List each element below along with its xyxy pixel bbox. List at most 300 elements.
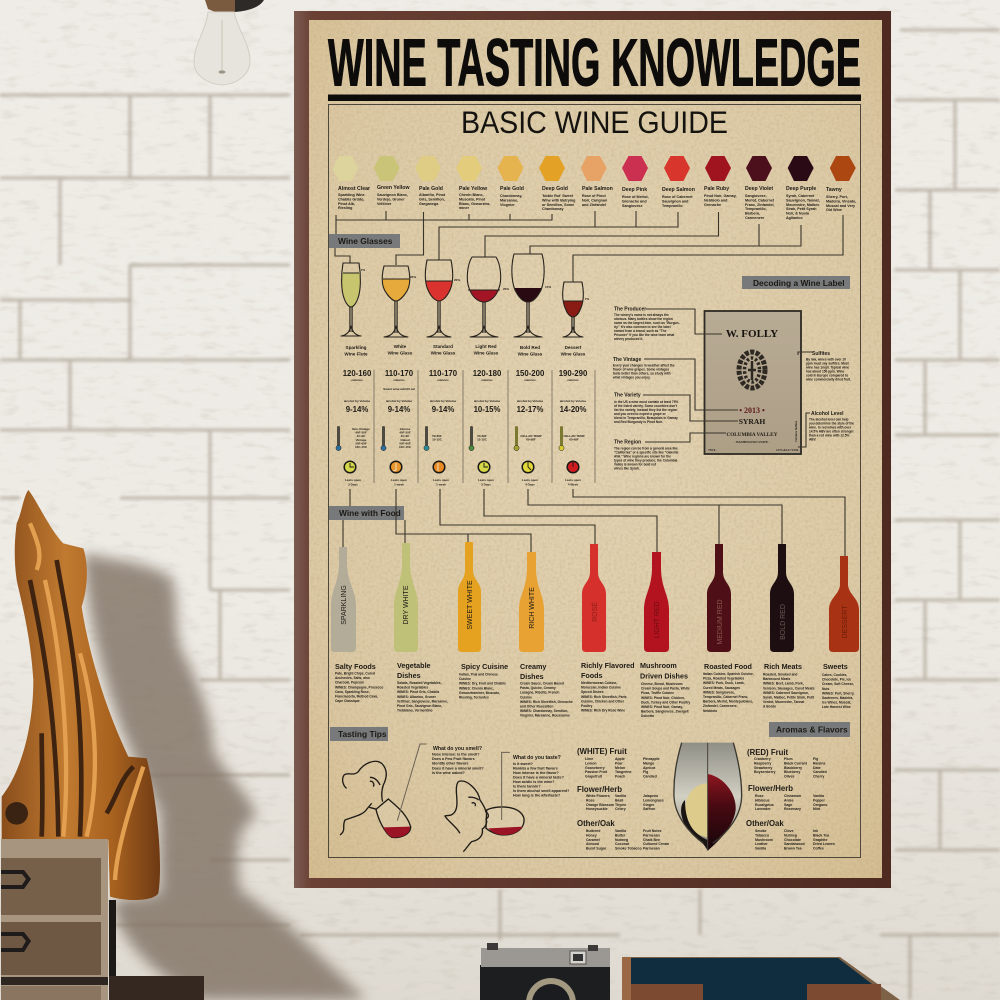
thermometers: [336, 426, 585, 451]
aromas: red wine list: Rose: [755, 794, 764, 798]
aromas: red wine list: Nutmeg: [784, 833, 797, 837]
hex pale gold: [415, 156, 441, 181]
thermometers: 60-68F: [526, 437, 536, 441]
glass names: [344, 344, 586, 357]
aromas: red wine list: Chocolate: [784, 838, 801, 842]
what do you smell: Does a Few Fruit flavors: [432, 757, 475, 761]
aromas: red wine list: Flower/Herb: [748, 784, 793, 793]
thermometers: Intense: [400, 427, 411, 431]
nutrition columns: calories and alcohol: 110-170: [429, 369, 458, 378]
food pairing: roasted food: WINES: Pork, Duck, Lamb,: [703, 681, 745, 685]
thermometers: 12-15C: [477, 437, 488, 441]
bottle: bold red: [770, 544, 794, 652]
aromas: red wine list: Sage: [784, 803, 792, 807]
food pairing: sweets: Ice Wines, Muscat,: [822, 701, 851, 705]
label note: alcohol level: ABV.: [809, 438, 817, 442]
aromas: red wine list: Olives: [784, 775, 795, 779]
clocks: lasts open: 4 Week: [568, 483, 578, 487]
hex deep purple: [788, 156, 814, 181]
aromas: red wine list: Candied: [813, 770, 827, 774]
aromas: white wine list: Caramel: [586, 838, 600, 842]
wine label diagram: SYRAH: [739, 417, 765, 426]
label note: sulfites: By law, wines with over 10: [806, 358, 846, 362]
nutrition columns: calories and alcohol: 150-200: [516, 369, 545, 378]
tawny text: Old Wine: [826, 208, 842, 212]
food pairing: vegetable dishes: Salads, Roasted Vegetables,: [397, 681, 442, 685]
pale salmon text: Noir, Carignan: [582, 198, 608, 202]
deep gold text: Chardonnay: [542, 207, 564, 211]
deep purple text: Aglianico: [786, 216, 803, 220]
clocks: lasts open: Lasts open: [478, 478, 494, 482]
deep gold text: Wine with Botrying: [542, 198, 575, 202]
food pairing: richly flavored foods: Moroccan, Indian Cuisine: [581, 686, 621, 690]
aromas: red wine list: Vanilla: [755, 847, 766, 851]
pale yellow text: Chenin Blanc,: [459, 193, 484, 197]
thermometers: 50F-60F: [399, 442, 411, 446]
aromas: white wine list: [577, 747, 669, 851]
label note: the region: wines like Syrah.: [613, 466, 640, 470]
aromas: white wine list: Lemongrass: [643, 798, 664, 802]
food pairing: sweets: Cream, Soft Cheese,: [822, 682, 854, 686]
food pairing: mushroom driven dishes: Duck, Turkey and Other Poultry: [641, 700, 690, 704]
clocks: lasts open: Lasts open: [565, 478, 581, 482]
food pairing: richly flavored foods: Mediterranean Cuisine,: [581, 681, 617, 685]
food pairing: creamy dishes: Cream Sauce, Cream Based: [520, 682, 564, 686]
deep violet text: Barbera,: [745, 212, 760, 216]
label note: the variety: In the US a wine must contain at least 75%: [614, 400, 678, 404]
aromas: white wine list: Cultured Cream: [643, 842, 669, 846]
inner border: [328, 104, 860, 858]
aromas: white wine list: Vanilla: [615, 794, 626, 798]
heading: tasting tips: [330, 727, 388, 741]
food pairing: vegetable dishes: WINES: Pinot Gris, Chablis: [397, 690, 439, 694]
food pairing: richly flavored foods: Poultry: [581, 704, 593, 708]
label note: alcohol level: wine. In red wines with over: [808, 426, 852, 430]
aromas: white wine list: Vanilla: [615, 829, 626, 833]
deep purple text: Deep Purple: [786, 186, 816, 192]
food pairing: spicy cuisine: Gewurztraminer, Muscato,: [459, 691, 500, 695]
aromas: red wine list: Lavender: [755, 807, 771, 811]
food pairing: mushroom driven dishes: Mushroom: [640, 661, 677, 670]
pale gold 2 text: Pale Gold: [500, 186, 524, 192]
aromas: white wine list: Butter: [615, 833, 626, 837]
clocks: lasts open: 3 Days: [348, 483, 358, 487]
label note: the region: "California" or a specific site like "Oakville: [614, 450, 679, 454]
heading: wine with food: [329, 506, 404, 520]
glass: light red wine: 20%: [503, 287, 509, 291]
label note: the producer: dy." It's also common to see the label: [614, 325, 671, 329]
nutrition columns: calories and alcohol: calories: [567, 378, 579, 382]
aromas: red wine list: Smoke: [755, 829, 767, 833]
wine label diagram: - WASHINGTON STATE -: [734, 440, 770, 444]
aromas: red wine list: Raspberry: [754, 761, 771, 765]
deep purple text: Syrah, Cabernet: [786, 194, 815, 198]
label note: sulfites: wine commercially dried fruit.: [805, 378, 851, 382]
deep gold text: or Semillon, Some: [542, 203, 574, 207]
clocks: lasts open: Lasts open: [391, 478, 407, 482]
aromas: red wine list: Black Tea: [813, 833, 829, 837]
connector lines glasses to bottles: [343, 489, 845, 556]
aromas: white wine list: Celery: [615, 807, 626, 811]
label note: sulfites: ppm must say sulfites. Most: [806, 362, 850, 366]
nutrition columns: calories and alcohol: calories: [351, 378, 363, 382]
thermometers: CELLAR TEMP: [520, 434, 542, 438]
food pairing: vegetable dishes: Roasted Vegetables: [397, 686, 428, 690]
wine label diagram: Contains Sulfites: [794, 420, 798, 442]
nutrition columns: calories and alcohol: calories: [481, 378, 493, 382]
label note: alcohol level: you determine the style of the: [809, 422, 854, 426]
deep salmon text: Tempranillo: [662, 204, 683, 208]
aromas: white wine list: Other/Oak: [577, 819, 615, 828]
nutrition columns: calories and alcohol: 9-14%: [432, 405, 454, 414]
food pairing: spicy cuisine: Cuisine: [459, 677, 471, 681]
aromas: white wine list: Honey: [586, 833, 597, 837]
green yellow text: Verdejo, Gruner: [377, 197, 405, 201]
aromas: red wine list: Eucalyptus: [755, 803, 774, 807]
aromas: white wine list: Fig: [643, 770, 648, 774]
vintage camera: [480, 943, 610, 1000]
thermometers: 4C-9C: [357, 434, 366, 438]
wine colour hexagons: [333, 156, 856, 181]
food pairing: richly flavored foods: WINES: Rich Dry Rose Wine: [581, 709, 625, 713]
label note: sulfites: has about 150 ppm. Wine: [806, 370, 844, 374]
wine label diagram: [704, 311, 801, 454]
deep salmon text: Rose of Cabernet: [662, 195, 693, 199]
aromas: red wine list: Leather: [755, 842, 768, 846]
food pairing: vegetable dishes: Pinot Gris, Sauvignon Blanc,: [397, 704, 442, 708]
food pairing: mushroom driven dishes: Cream Soups and Pasta, White: [641, 687, 690, 691]
pale yellow text: Muscato, Pinot: [459, 197, 486, 201]
hex deep salmon: [664, 156, 690, 181]
what do you smell: Does it have a mineral smell?: [432, 766, 484, 770]
aromas: red wine list: Mint: [813, 807, 821, 811]
thermometers: CELLAR TEMP: [563, 434, 585, 438]
food pairing: sweets: Sauternes, Madeira,: [822, 696, 853, 700]
glass names: Dessert: [565, 345, 582, 350]
bottle: medium red: MEDIUM RED: [717, 599, 724, 645]
hex pale gold 2: [498, 156, 524, 181]
pale salmon text: Rose of Pinot: [582, 194, 607, 198]
food pairing: vegetable dishes: Trebbiano, Vermentino: [397, 709, 433, 713]
clocks: lasts open: Lasts open: [345, 478, 361, 482]
glass names: Light Red: [475, 344, 497, 349]
food pairing: creamy dishes: and Other Roussillon: [520, 704, 553, 708]
aromas: red wine list: Pepper: [813, 798, 826, 802]
hex deep violet: [746, 156, 772, 181]
aromas: white wine list: Gooseberry: [585, 766, 605, 770]
aromas: red wine list: Plum: [784, 757, 793, 761]
food pairing: salty foods: Charcoal, Popcorn: [335, 681, 364, 685]
deep purple text: Noir, & Nuvia: [786, 212, 810, 216]
label note: the variety: The Variety: [614, 392, 641, 398]
nutrition columns: calories and alcohol: alcohol by Volume: [474, 399, 500, 403]
food pairing: salty foods: Salty Foods: [335, 662, 376, 671]
what do you taste: Is there tannin?: [513, 784, 541, 788]
heading: decoding a wine label: [742, 276, 850, 289]
deep violet text: Tempranillo,: [745, 207, 767, 211]
wooden drawers: [1, 839, 204, 1000]
food pairing: spicy cuisine: WINES: Chenin Blanc,: [459, 686, 494, 690]
nutrition columns: calories and alcohol: calories: [437, 378, 449, 382]
food pairing: rich meats: Roasted, Smoked and: [763, 672, 797, 676]
nutrition columns: calories and alcohol: alcohol by Volume: [560, 399, 586, 403]
food pairing: rich meats: Barbecued Meats: [763, 677, 790, 681]
food pairing: creamy dishes: WINES: Chardonnay, Semillon,: [520, 709, 568, 713]
pale gold 2 text: Chardonnay,: [500, 194, 522, 198]
label note: the region: AVA." Wine regions are known for the: [614, 454, 671, 458]
what do you taste: Is it sweet?: [513, 762, 534, 766]
label note: the region: The Region: [614, 440, 641, 446]
glass: bold red wine: [508, 254, 551, 337]
nutrition columns: calories and alcohol: 110-170: [385, 369, 414, 378]
glass names: Standard: [433, 344, 453, 349]
green yellow text: Green Yellow: [377, 185, 410, 191]
food pairing: creamy dishes: WINES: Rich Sheetfish, Grenache: [520, 700, 573, 704]
pale gold text: Gris, Semillon,: [419, 197, 445, 201]
label note: alcohol level: 14.5% ABV are often stronger: [809, 430, 854, 434]
food pairing: roasted food: Italian Cuisine, Spanish Cuisine,: [703, 672, 754, 676]
hex pale salmon: [581, 156, 607, 181]
deep pink text: Deep Pink: [622, 187, 647, 193]
aromas: white wine list: Melon: [615, 766, 625, 770]
nutrition columns: calories and alcohol: alcohol by Volume: [386, 399, 412, 403]
nutrition columns: calories and alcohol: 10-15%: [474, 405, 501, 414]
label note: the producer: The winery's name is not always the: [614, 313, 669, 317]
heading: decoding a wine label: Decoding a Wine Label: [753, 278, 845, 288]
aromas: red wine list: Cherry: [813, 775, 824, 779]
pale yellow text: Pale Yellow: [459, 186, 488, 192]
aromas: red wine list: Raisins: [813, 761, 826, 765]
food pairing: richly flavored foods: Richly Flavored: [581, 661, 635, 670]
aromas: white wine list: Lemon: [585, 761, 596, 765]
what do you smell: Is the wine oaked?: [432, 771, 466, 775]
label note: alcohol level: Alcohol Level: [811, 411, 844, 417]
thermometers: 10-15C: [432, 437, 443, 441]
thermometers: 10C-15C: [355, 445, 368, 449]
deep pink text: Sangiovese: [622, 204, 642, 208]
aromas: red wine list: Brown Tea: [784, 847, 802, 851]
wine label diagram: 14%ALC/VOL: [776, 448, 800, 452]
nutrition columns: calories and alcohol: 9-14%: [346, 405, 368, 414]
what do you taste: How intense is the flavor?: [513, 771, 559, 775]
aromas: red wine list: Oregano: [813, 803, 827, 807]
food pairing: rich meats: & Bordo: [763, 705, 776, 709]
label note: alcohol level: The alcohol level can help: [809, 418, 849, 422]
nutrition columns: calories and alcohol: calories: [393, 378, 405, 382]
aromas: white wine list: Fruit Notes: [643, 829, 662, 833]
glass: bold red wine: 15%: [545, 285, 551, 289]
food pairing: rich meats: WINES: Beef, Lamb, Pork,: [763, 682, 804, 686]
aromas: white wine list: (WHITE) Fruit: [577, 747, 627, 756]
aromas: white wine list: Tangerine: [615, 770, 632, 774]
wall shadow of wood sculpture: [83, 553, 367, 1000]
aromas: white wine list: Basil: [615, 798, 623, 802]
deep salmon text: Deep Salmon: [662, 187, 695, 193]
glass names: Wine Glass: [474, 351, 499, 356]
what do you taste: Does it have a mineral taste?: [513, 776, 565, 780]
glass: standard wine: [424, 260, 460, 338]
thermometers: Oaked: [400, 438, 410, 442]
pale gold 2 text: Viognier: [500, 203, 515, 207]
glass names: Wine Flute: [344, 352, 368, 357]
hanging light bulb: [194, 0, 264, 85]
wine colour descriptions: [338, 185, 856, 220]
aromas: white wine list: Lime: [585, 757, 593, 761]
aromas: white wine list: Flower/Herb: [577, 785, 622, 794]
food pairing: vegetable dishes: Vegetable: [397, 661, 431, 670]
food pairing: creamy dishes: Creamy: [520, 662, 546, 671]
clocks: lasts open: 4 Days: [525, 483, 535, 487]
thermometers: 53-60F: [477, 434, 487, 438]
thermometers: Vintage: [356, 438, 367, 442]
aromas: white wine list: Jalapeno: [643, 794, 658, 798]
deep violet text: Carmenere: [745, 216, 764, 220]
connector lines colours to glasses: [335, 211, 843, 282]
label note: the producer: name as the largest item, such as "Burgun-: [614, 321, 680, 325]
aromas: red wine list: Other/Oak: [746, 819, 784, 828]
wine label diagram: • 2013 •: [739, 406, 765, 415]
aromas: red wine list: Tobacco: [755, 833, 769, 837]
food pairing: roasted food: Tempranillo, Cabernet Franc,: [703, 695, 748, 699]
glass names: Wine Glass: [518, 352, 543, 357]
bottle: rose: ROSÉ: [590, 602, 599, 622]
framed poster: [294, 11, 891, 888]
aromas: red wine list: Blackberry: [784, 766, 802, 770]
deep gold text: 'Noble Rot' Sweet: [542, 194, 574, 198]
green yellow text: Veltliner: [377, 202, 392, 206]
what do you taste: How long is the aftertaste?: [513, 794, 561, 798]
nutrition columns: calories and alcohol: 120-180: [473, 369, 502, 378]
label leader lines: [643, 309, 813, 447]
deep violet text: Deep Violet: [745, 186, 773, 192]
aromas: white wine list: Rose: [586, 798, 595, 802]
subtitle: BASIC WINE GUIDE: [461, 104, 728, 140]
aromas: red wine list: Vanilla: [813, 794, 824, 798]
aromas: white wine list: Peach: [615, 775, 625, 779]
wine label diagram: 75CL: [708, 448, 717, 452]
label note: the producer: obvious. Many bottles show the region: [614, 317, 673, 321]
food pairing: sweets: Sweets: [823, 662, 848, 671]
food pairing: mushroom driven dishes: Pizza, Truffle Cuisine: [641, 691, 674, 695]
aromas: red wine list: Dried Leaves: [813, 842, 835, 846]
pale yellow text: miner: [459, 206, 470, 210]
aromas: white wine list: Candied: [643, 775, 657, 779]
heading: wine glasses: [329, 234, 400, 248]
aromas: white wine list: Pear: [615, 761, 623, 765]
label note: the producer: Prisoner" if you like the wine learn what: [614, 333, 675, 337]
food pairing: richly flavored foods: WINES: Rich Sheetfish, Paris: [581, 695, 627, 699]
aromas: red wine list: Mushroom: [755, 838, 773, 842]
nutrition columns: calories and alcohol: alcohol by Volume: [517, 399, 543, 403]
food pairing: roasted food: WINES: Sangiovese,: [703, 690, 735, 694]
hex deep gold: [539, 156, 565, 181]
aromas: white wine list: Apricot: [643, 766, 656, 770]
aromas: red wine list: Cinnamon: [784, 794, 801, 798]
label note: the variety: blend in Tempranillo, Beaujolais in Gamay: [614, 416, 678, 420]
thermometers: 40F-50F: [399, 430, 411, 434]
aromas: red wine list: Clove: [784, 829, 794, 833]
thermometers: 50-60F: [432, 434, 442, 438]
food pairing: creamy dishes: Cuisine: [520, 695, 532, 699]
food pairing: salty foods: Anchovies, Salts, also: [335, 676, 370, 680]
pale salmon text: and Zinfandel: [582, 203, 606, 207]
aromas: white wine list: Chalk Bee: [643, 838, 660, 842]
almost clear text: Riesling: [338, 206, 352, 210]
aromas: red wine list: Rosemary: [784, 807, 801, 811]
tawny text: Sherry, Port,: [826, 195, 848, 199]
aromas: white wine list: Parmesan: [643, 847, 660, 851]
aromas: white wine list: Almond: [586, 842, 599, 846]
bottle: rich white: RICH WHITE: [529, 587, 536, 629]
aromas: white wine list: Passion Fruit: [585, 770, 608, 774]
food pairing: vegetable dishes: WINES: Albarino, Gruner: [397, 695, 437, 699]
aromas: red wine list: Graphite: [813, 838, 827, 842]
pale gold text: Pale Gold: [419, 186, 443, 192]
nutrition columns: calories and alcohol: 14-20%: [560, 405, 587, 414]
wood sculpture: [2, 490, 160, 900]
label note: the region: The region can be from a general area like: [614, 446, 678, 450]
clocks: lasts open: 3 Days: [481, 483, 491, 487]
nutrition columns: calories and alcohol: calories: [524, 378, 536, 382]
glass names: Bold Red: [520, 345, 540, 350]
nutrition columns: calories and alcohol: [343, 369, 595, 483]
label note: sulfites: Sulfites: [812, 351, 830, 357]
aromas: red wine list: [746, 748, 835, 851]
glass names: Sparkling: [346, 345, 367, 350]
hex pale yellow: [456, 156, 482, 181]
label crest: [739, 352, 765, 388]
aromas: red wine list: Strawberry: [754, 766, 772, 770]
nutrition columns: calories and alcohol: 190-290: [559, 369, 588, 378]
tasting illustration: smelling: [340, 744, 427, 837]
green yellow text: Sauvignon Blanc,: [377, 193, 408, 197]
aromas: white wine list: Nutmeg: [615, 838, 628, 842]
glass: dessert wine: 7%: [585, 297, 589, 301]
what do you taste: Rank/is a few fruit flavors: [513, 766, 558, 770]
deep salmon text: Sauvignon and: [662, 199, 689, 203]
aromas: red wine list: Blueberry: [784, 770, 800, 774]
aromas: white wine list: Mango: [643, 761, 654, 765]
deep purple text: Mourvedre, Malbec: [786, 203, 819, 207]
thermometers: 4C-9C: [401, 434, 410, 438]
heading: aromas and flavors: [769, 722, 850, 737]
food pairing: spicy cuisine: WINES: Dry, Fruit and Chablis: [459, 682, 506, 686]
what do you smell: What do you smell?: [433, 746, 482, 752]
what do you smell: Nose intense: Is the smell?: [432, 752, 480, 756]
almost clear text: Pinot Alb,: [338, 202, 355, 206]
food pairing: spicy cuisine: Indian, Thai and Chinese: [459, 672, 498, 676]
food pairing: salty foods: Franciacorta, Method Cava,: [335, 694, 378, 698]
food pairing: roasted food: Pizza, Roasted Vegetables: [703, 677, 744, 681]
deep purple text: Sauvignon, Tannat,: [786, 198, 820, 202]
glass: sparkling wine flute: [338, 263, 365, 336]
aromas: white wine list: Burnt Sugar: [586, 847, 607, 851]
label note: the producer: named from a brand, such as "The: [614, 329, 667, 333]
aromas: red wine list: Boysenberry: [754, 770, 775, 774]
wine label diagram: W. FOLLY: [726, 328, 778, 340]
what do you taste: What do you taste?: [513, 755, 561, 761]
label note: the variety: of the listed variety. Some countries don't: [614, 404, 678, 408]
food pairing: vegetable dishes: Dishes: [397, 671, 421, 680]
almost clear text: Chablis Grüdo,: [338, 197, 364, 201]
aromas: white wine list: White Flowers: [586, 794, 610, 798]
aromas: red wine list: Hibiscus: [755, 798, 770, 802]
hex deep pink: [622, 156, 648, 181]
food pairing: sweets: Nuts: [822, 687, 829, 691]
label note: sulfites: sold in Europe compared to: [806, 374, 848, 378]
food pairing: rich meats: Syrah, Malbec, Petite Sirah, Petit: [763, 696, 815, 700]
label note: the vintage: what vintages you enjoy.: [612, 376, 651, 380]
